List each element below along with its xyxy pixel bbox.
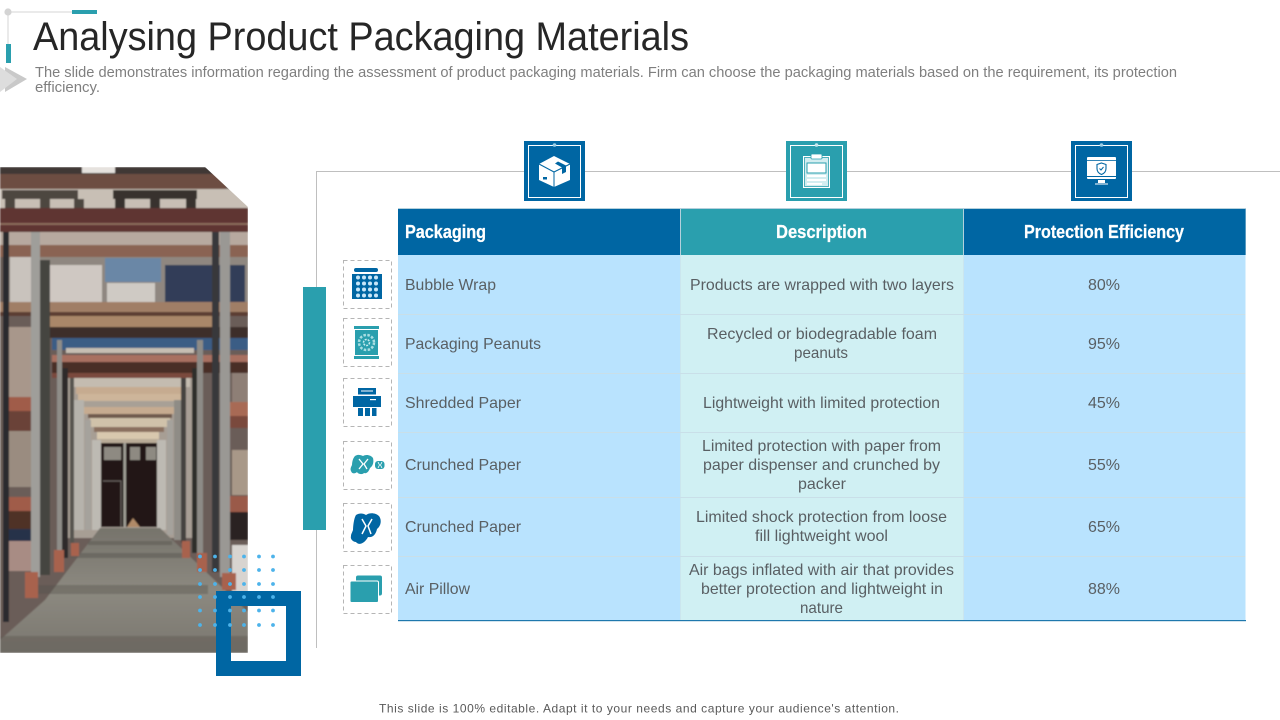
column: descriptions	[689, 277, 954, 617]
rack bases	[25, 572, 38, 598]
column: packaging names: Crunched Paper	[405, 519, 522, 536]
icon: crunched paper blue	[344, 504, 392, 552]
column: descriptions: Lightweight with limited protection	[703, 395, 940, 412]
column: protection efficiency values: 55%	[1088, 457, 1120, 474]
photo: warehouse aisle	[0, 167, 248, 653]
door	[101, 443, 157, 527]
column: descriptions: packer	[798, 476, 847, 493]
decorative header corner	[0, 8, 97, 92]
column: protection efficiency values: 88%	[1088, 581, 1120, 598]
column: descriptions: Products are wrapped with two layers	[690, 277, 954, 294]
column: packaging names: Air Pillow	[405, 581, 470, 598]
dot grid	[198, 555, 275, 627]
column: protection efficiency values	[1088, 277, 1120, 598]
icon: bubble wrap	[344, 260, 392, 308]
column: packaging names: Shredded Paper	[405, 395, 522, 412]
icon: crunched paper teal	[344, 442, 392, 490]
connector line	[316, 172, 1280, 648]
column: descriptions: Recycled or biodegradable foam	[707, 326, 937, 343]
table header row: Description	[776, 221, 867, 242]
icon: monitor with shield	[1071, 141, 1132, 201]
uprights	[3, 232, 9, 622]
subtitle text: The slide demonstrates information regarding the assessment of product packaging materials. Firm can choose the packaging materials based on the requirement, its protection	[35, 65, 1177, 81]
icon: packaging peanuts bag	[344, 318, 392, 366]
icon: clipboard report	[786, 141, 847, 201]
subtitle text: efficiency.	[35, 80, 100, 96]
left and right racks	[8, 327, 32, 397]
footer note: This slide is 100% editable. Adapt it to your needs and capture your audience's attention.	[379, 702, 899, 716]
column: protection efficiency values: 45%	[1088, 395, 1120, 412]
accent bar	[303, 287, 326, 530]
table	[398, 208, 1246, 621]
subtitle text	[35, 65, 1177, 96]
table body cells	[398, 255, 1246, 621]
table header row	[398, 208, 1246, 255]
column: descriptions: nature	[800, 600, 843, 617]
centre aisle	[52, 355, 248, 362]
column: descriptions: better protection and lightweight in	[701, 581, 943, 598]
column: descriptions: peanuts	[794, 345, 848, 362]
icon: air pillow	[344, 566, 392, 614]
column: protection efficiency values: 95%	[1088, 336, 1120, 353]
column: packaging names: Packaging Peanuts	[405, 336, 541, 353]
column: descriptions: paper dispenser and crunched by	[703, 457, 940, 474]
title: Analysing Product Packaging Materials	[33, 15, 689, 59]
column: protection efficiency values: 80%	[1088, 277, 1120, 294]
table header row: Protection Efficiency	[1024, 221, 1185, 242]
column: descriptions: fill lightweight wool	[755, 528, 888, 545]
table header row: Packaging	[405, 221, 486, 242]
column: descriptions: Air bags inflated with air that provides	[689, 562, 954, 579]
column: descriptions: Limited protection with paper from	[702, 438, 941, 455]
column: packaging names: Crunched Paper	[405, 457, 522, 474]
icon: paper shredder	[344, 378, 392, 426]
column: packaging names: Bubble Wrap	[405, 277, 496, 294]
decorative blue square frame	[216, 591, 301, 676]
column: descriptions: Limited shock protection from loose	[696, 509, 947, 526]
column: protection efficiency values: 65%	[1088, 519, 1120, 536]
column: packaging names	[405, 277, 541, 598]
icon: package box	[524, 141, 585, 201]
floor	[0, 528, 248, 653]
upper shelf goods	[8, 257, 248, 302]
top pallets and beams	[0, 167, 248, 174]
